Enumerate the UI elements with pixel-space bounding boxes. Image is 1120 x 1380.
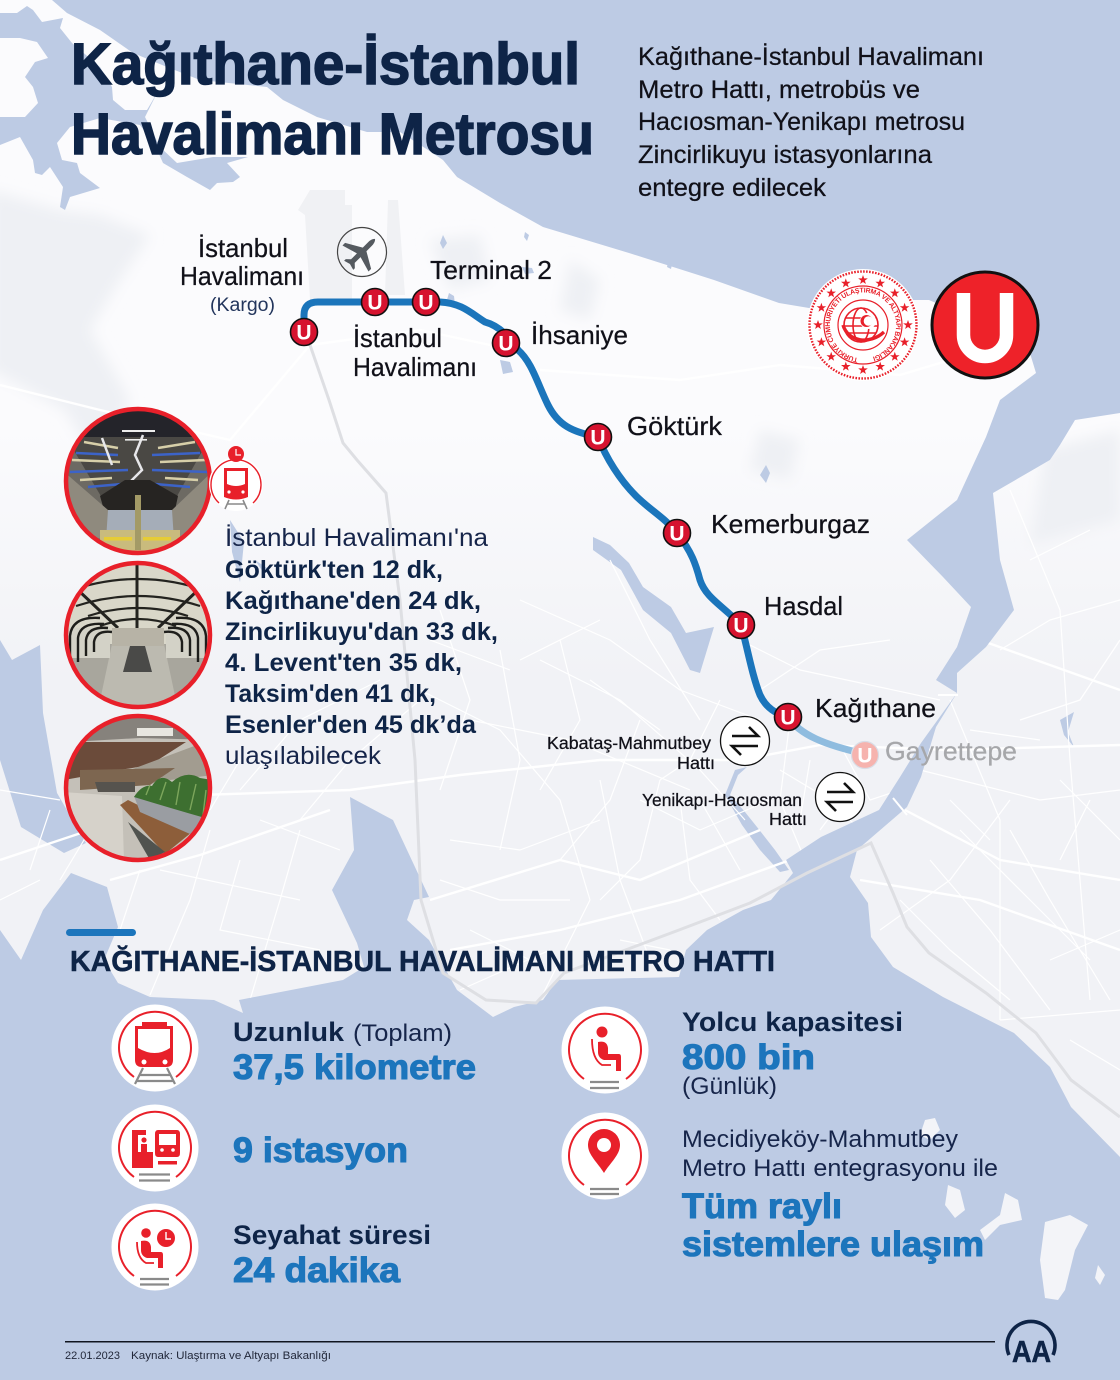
station labels: Kağıthane [815,693,936,723]
icon: location pin [562,1112,648,1200]
title: Havalimanı Metrosu [71,102,594,167]
station markers: U [498,332,514,356]
metro route line [304,302,865,754]
station markers: U [418,292,434,314]
title [71,32,594,167]
station labels: Terminal 2 [430,255,552,285]
station markers: U [669,522,685,546]
travel times text block [225,523,498,770]
photo: concourse with planter [60,712,220,864]
AA logo [1007,1321,1055,1369]
islands [920,1118,1105,1300]
subtitle text block: Metro Hattı, metrobüs ve [638,76,920,104]
icon: seated passenger [562,1006,648,1094]
transfer: Kabataş-Mahmutbey [547,716,770,773]
metric: rail integration: Tüm raylı [682,1187,842,1226]
station markers: U [780,706,796,730]
metric: passenger capacity: (Günlük) [682,1073,777,1100]
metric: travel time: Seyahat süresi [233,1220,431,1250]
footer rule [65,1341,995,1342]
transfer: Yenikapı-Hacıosman: Yenikapı-Hacıosman [642,790,802,810]
section heading: KAĞITHANE-İSTANBUL HAVALİMANI METRO HATTI [70,944,775,978]
lake and water bodies [0,6,1074,872]
metric: rail integration: Mecidiyeköy-Mahmutbey [682,1126,958,1153]
metric: stations: 9 istasyon [233,1131,408,1170]
travel times text block: Zincirlikuyu'dan 33 dk, [225,618,498,646]
travel times text block: Kağıthane'den 24 dk, [225,587,481,615]
metric: stations [112,1104,408,1192]
station labels: (Kargo) [210,295,275,316]
road network [0,330,1120,1070]
footer source: Kaynak: Ulaştırma ve Altyapı Bakanlığı [131,1350,331,1362]
station markers: U [857,744,873,768]
AA logo: AA [1012,1334,1051,1369]
transfer: Yenikapı-Hacıosman: Hattı [769,809,807,829]
subtitle text block: entegre edilecek [638,174,827,202]
station markers: U [296,322,312,344]
transfer: Kabataş-Mahmutbey: Hattı [677,753,715,773]
station labels: Hasdal [764,591,843,621]
photo: station with lightning ceiling [64,406,212,556]
icon: airplane [336,226,388,278]
station labels: İstanbul [198,233,288,263]
station labels: Havalimanı [353,352,477,382]
metric: passenger capacity [562,1006,903,1100]
subtitle text block [638,42,984,202]
icon: train [112,1004,198,1092]
station labels: İhsaniye [531,320,628,350]
metric: travel time [112,1204,431,1290]
station labels: Göktürk [627,411,723,441]
metric: rail integration: sistemlere ulaşım [682,1225,984,1264]
subtitle text block: Hacıosman-Yenikapı metrosu [638,108,965,136]
station labels: Havalimanı [180,261,304,291]
transfer: Yenikapı-Hacıosman [642,772,864,829]
station markers [290,288,878,768]
Bosphorus bridges [893,695,958,815]
metric: length: (Toplam) [353,1020,452,1047]
transfer: Kabataş-Mahmutbey: Kabataş-Mahmutbey [547,733,711,753]
subtitle text block: Kağıthane-İstanbul Havalimanı [638,42,984,71]
metric: length [112,1004,476,1092]
station markers: U [733,614,749,638]
footer source: 22.01.2023 [65,1350,120,1362]
metric: length: Uzunluk [233,1017,345,1047]
title: Kağıthane-İstanbul [71,32,580,97]
station labels: Kemerburgaz [711,509,870,539]
metric: passenger capacity: Yolcu kapasitesi [682,1007,903,1037]
metric: passenger capacity: 800 bin [682,1038,815,1077]
station labels: İstanbul [353,323,442,353]
metric: rail integration: Metro Hattı entegrasyonu ile [682,1155,998,1182]
travel times text block: İstanbul Havalimanı'na [225,523,488,552]
ministry seal: TÜRKİYE CUMHURİYETİ ULAŞTIRMA VE ALTYAPI BAKANLIĞI [825,288,901,363]
icon: train with clock [209,446,263,511]
ministry seal [808,269,918,380]
metro logo: U [932,272,1038,378]
metric: travel time: 24 dakika [233,1251,401,1290]
station labels [180,233,1017,766]
travel times text block: Göktürk'ten 12 dk, [225,556,443,584]
subtitle text block: Zincirlikuyu istasyonlarına [638,141,932,169]
station markers: U [590,426,606,450]
travel times text block: Esenler'den 45 dk’da [225,711,477,739]
travel times text block: ulaşılabilecek [225,742,382,770]
icon: seated passenger with clock [112,1204,198,1290]
section accent bar [66,929,136,936]
photo: platform hall [60,560,220,714]
travel times text block: Taksim'den 41 dk, [225,680,436,708]
icon: station [112,1104,198,1192]
metric: rail integration [562,1112,998,1264]
station markers: U [367,292,383,314]
station labels: Gayrettepe [885,736,1017,766]
metric: length: 37,5 kilometre [233,1048,476,1087]
travel times text block: 4. Levent'ten 35 dk, [225,649,462,677]
highway line [310,345,1120,1117]
